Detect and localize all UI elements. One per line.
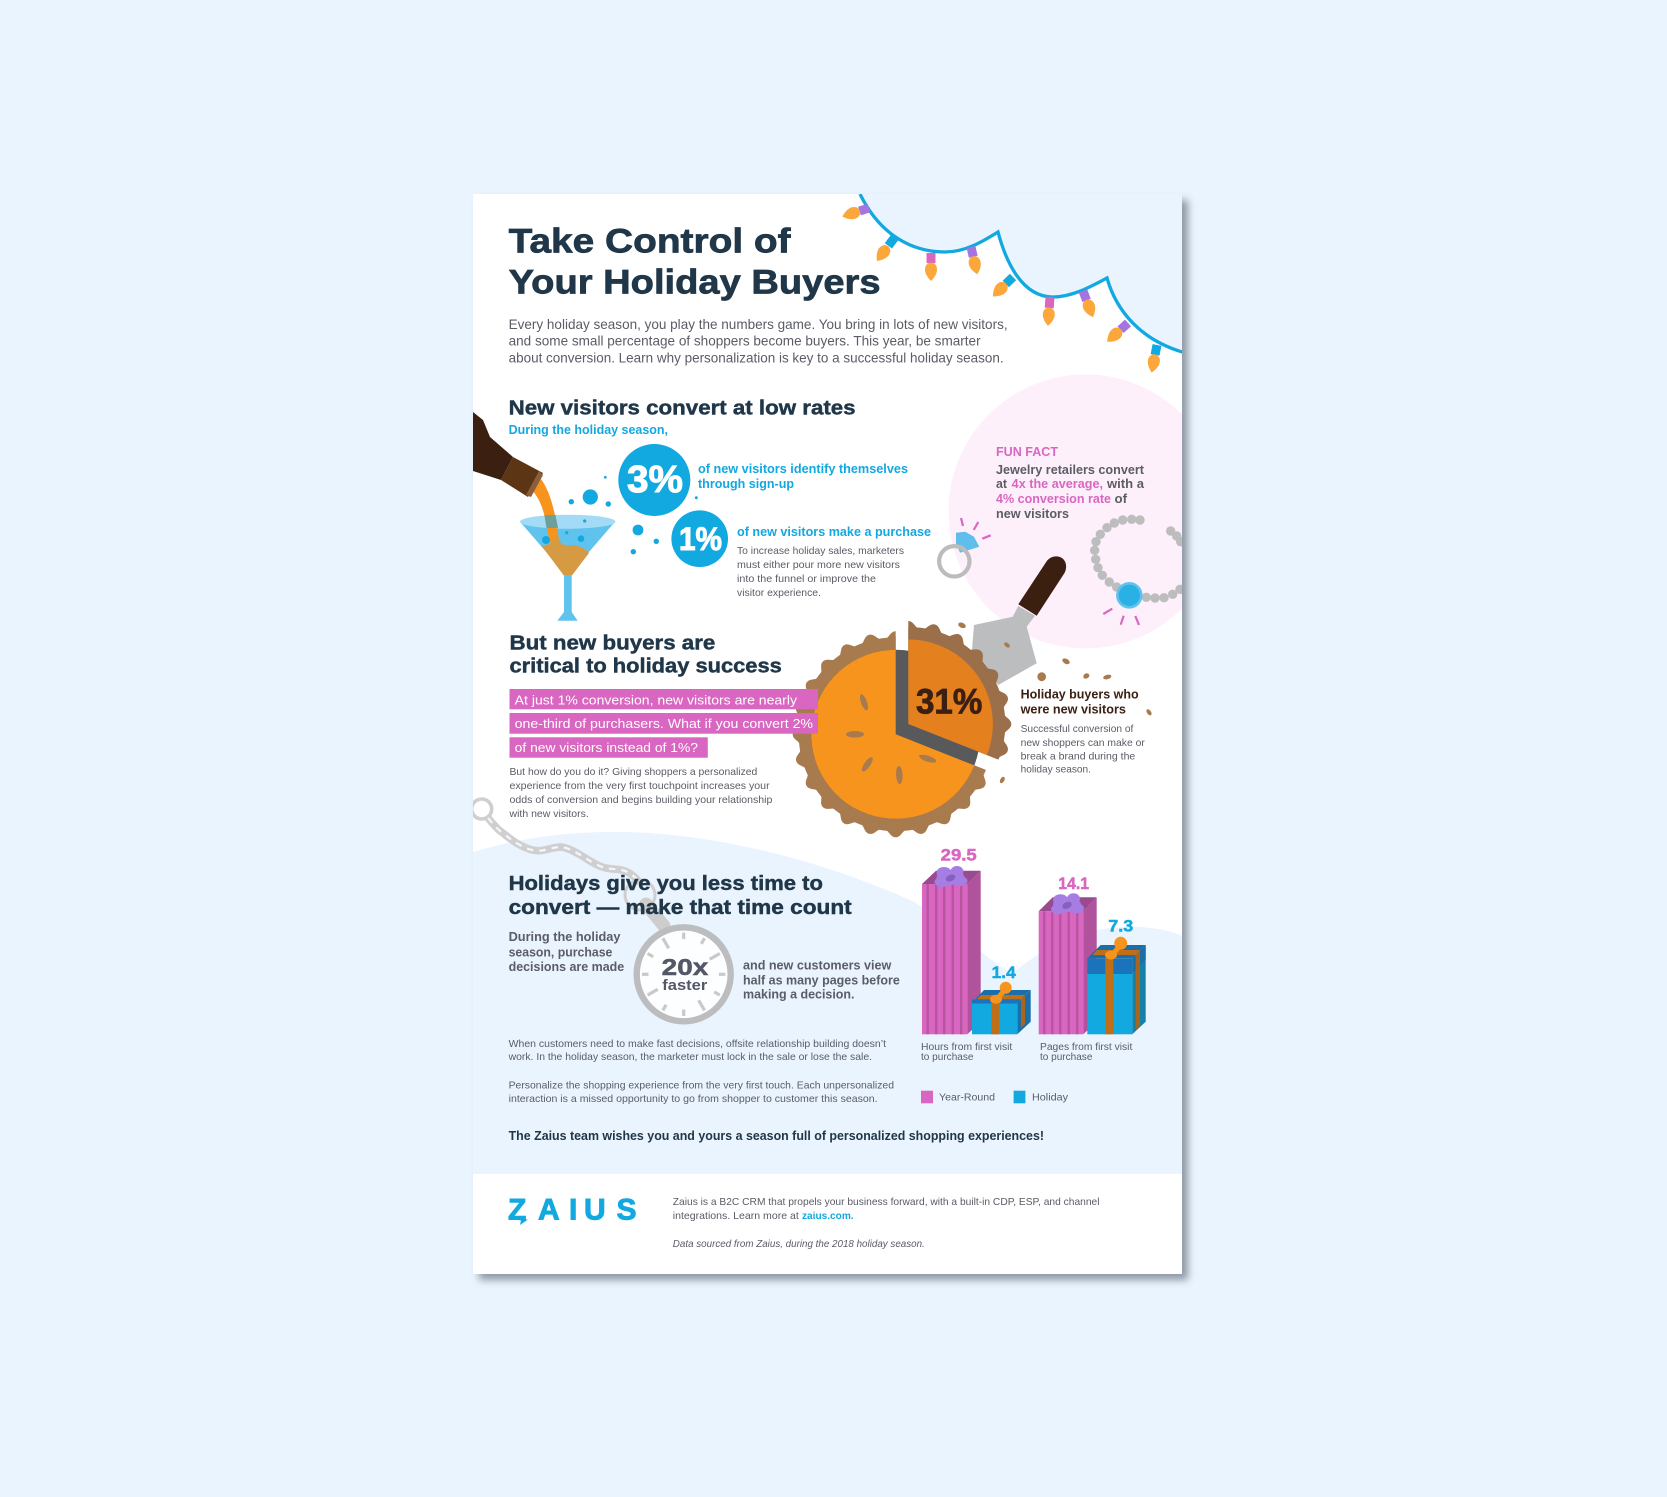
- stat: 3%: [618, 444, 690, 516]
- text: new customers view: [743, 958, 900, 1001]
- text: holiday buyers heading: were new visitors: [1020, 702, 1126, 716]
- callout: pink highlighted text: [510, 689, 818, 758]
- icon: stopwatch 20x faster: [637, 927, 731, 1021]
- stat: 1% description: of new visitors make a purchase: [737, 525, 931, 539]
- page shadow: [479, 200, 1188, 1280]
- chart: pie showing 31 percent: [793, 621, 1011, 837]
- text block: successful conversion: holiday season.: [1021, 764, 1091, 776]
- text: purchase decisions: season, purchase: [509, 945, 612, 959]
- stat: 3% description: of new visitors identify themselves: [698, 462, 908, 476]
- legend: Year-Round: [939, 1092, 995, 1103]
- intro paragraph: and some small percentage of shoppers become buyers. This year, be smarter: [509, 333, 981, 349]
- light bulb 6: [1042, 296, 1055, 326]
- heading: new buyers: But new buyers are: [510, 631, 715, 654]
- light bulb 9: [1148, 344, 1162, 372]
- stat: 1%: 1%: [679, 521, 722, 557]
- caption: pages: Pages from first visit: [1040, 1042, 1133, 1053]
- text: new customers view: and new customers view: [743, 958, 892, 972]
- panel: lower light blue background: [473, 832, 1182, 1174]
- footer description: Zaius is a B2C CRM that propels your business forward, with a built-in CDP, ESP, and channel: [673, 1196, 1100, 1208]
- light bulb 8: [1107, 320, 1131, 342]
- caption: hours: Hours from first visit: [921, 1042, 1013, 1053]
- stopwatch label: 20x: [662, 954, 708, 980]
- glass stem: [564, 576, 572, 614]
- bar: holiday pages: [1087, 937, 1146, 1034]
- text block: personalized experience: But how do you do it? Giving shoppers a personalized: [510, 766, 757, 778]
- heading: holidays less time: Holidays give you less time to: [509, 872, 823, 895]
- text block: personalize experience: [509, 1079, 894, 1105]
- pie vents: [846, 693, 937, 784]
- icon: pearl necklace: [1090, 515, 1185, 625]
- text block: fast decisions: work. In the holiday season, the marketer must lock in the sale or lose the sale.: [508, 1051, 872, 1063]
- glass rim: [520, 515, 615, 529]
- sky behind garland: [860, 194, 1182, 352]
- bar chart: gifts hours from first visit: [921, 846, 1031, 1063]
- fun fact text: at: [996, 477, 1008, 491]
- bottle body: [473, 412, 513, 480]
- garland string: [860, 194, 1184, 352]
- pie value: 31%: [916, 682, 982, 721]
- text block: fast decisions: When customers need to make fast decisions, offsite relationship building doesn’t: [509, 1038, 886, 1050]
- text block: increase holiday sales: To increase holiday sales, marketers: [737, 545, 904, 557]
- stat: 3%: 3%: [627, 459, 683, 501]
- subheading: during the holiday season: During the holiday season,: [509, 423, 668, 437]
- glass base: [557, 612, 578, 621]
- pie crust: [793, 631, 999, 837]
- light bulb 2: [876, 236, 898, 261]
- crumbs: [957, 621, 1153, 784]
- closing message: The Zaius team wishes you and yours a season full of personalized shopping experiences!: [509, 1129, 1044, 1143]
- text block: increase holiday sales: must either pour more new visitors: [737, 559, 900, 571]
- stream over rim: [544, 515, 558, 528]
- value: 29.5: 29.5: [941, 846, 977, 865]
- text: holiday buyers heading: [1020, 687, 1139, 716]
- fun fact text: [996, 445, 1145, 521]
- infographic sheet: [473, 194, 1182, 1274]
- light bulb 5: [992, 274, 1016, 296]
- heading: holidays less time: convert — make that time count: [509, 896, 852, 919]
- text block: successful conversion: [1021, 723, 1145, 776]
- heading: holidays less time: [509, 872, 852, 919]
- heading: new buyers: [510, 631, 782, 678]
- caption: hours: to purchase: [921, 1052, 974, 1063]
- text: holiday buyers heading: Holiday buyers who: [1021, 687, 1139, 701]
- panel: fun fact pink circle: [948, 374, 1182, 648]
- caption: pages: to purchase: [1040, 1052, 1093, 1063]
- bar: year-round pages: [1039, 893, 1097, 1034]
- bottle lip: [526, 471, 543, 497]
- intro paragraph: Every holiday season, you play the numbers game. You bring in lots of new visitors,: [509, 316, 1008, 332]
- icon: stopwatch chain: [472, 799, 664, 926]
- fun fact text: 4% conversion rate: [996, 492, 1111, 506]
- stat: 3% description: [698, 462, 908, 491]
- legend: [921, 1091, 1068, 1103]
- intro paragraph: about conversion. Learn why personalization is key to a successful holiday season.: [509, 350, 1004, 366]
- heading: new buyers: critical to holiday success: [510, 655, 782, 678]
- stat: 1%: [671, 510, 728, 567]
- light bulb 3: [925, 253, 937, 281]
- fun fact text: 4x the average,: [1012, 477, 1103, 491]
- footer description: integrations. Learn more at: [673, 1210, 799, 1222]
- legend: Holiday: [1032, 1092, 1068, 1103]
- title: Your Holiday Buyers: [509, 263, 881, 301]
- fun fact text: Jewelry retailers convert: [996, 463, 1145, 477]
- text: new customers view: making a decision.: [743, 987, 854, 1001]
- logo: Zaius: ZAIUS: [508, 1194, 637, 1227]
- light bulb 7: [1078, 289, 1096, 318]
- text block: increase holiday sales: [737, 545, 904, 599]
- icon: diamond ring: [939, 518, 991, 576]
- text block: personalize experience: interaction is a missed opportunity to go from shopper to customer this season.: [509, 1093, 878, 1105]
- value: 1.4: 1.4: [992, 963, 1016, 982]
- glass cone: [520, 522, 615, 577]
- text block: personalized experience: odds of conversion and begins building your relationship: [510, 794, 773, 806]
- title: Take Control of: [509, 223, 791, 261]
- caption: pages: [1040, 1042, 1133, 1063]
- text block: successful conversion: Successful conversion of: [1021, 723, 1133, 735]
- text block: successful conversion: break a brand during the: [1021, 750, 1135, 762]
- fun fact text: new visitors: [996, 507, 1069, 521]
- callout: pink highlighted text: one-third of purchasers. What if you convert 2%: [515, 716, 813, 731]
- text block: personalized experience: with new visitors.: [509, 808, 589, 820]
- text block: personalize experience: Personalize the shopping experience from the very first touch. Each unpersonalized: [509, 1079, 894, 1091]
- panel: footer: [473, 1174, 1182, 1274]
- text block: successful conversion: new shoppers can make or: [1021, 737, 1145, 749]
- pie filling: [811, 650, 974, 819]
- text: purchase decisions: During the holiday: [509, 930, 621, 944]
- text block: personalized experience: experience from the very first touchpoint increases your: [510, 780, 770, 792]
- text block: personalized experience: [509, 766, 773, 820]
- light bulb 4: [966, 246, 981, 274]
- caption: hours: [921, 1042, 1013, 1063]
- bottle neck: [501, 457, 543, 497]
- fun fact text: of: [1114, 492, 1128, 506]
- icon: stopwatch 20x faster: faster: [662, 977, 707, 994]
- value: 14.1: 14.1: [1058, 874, 1089, 893]
- stopwatch ticks: [642, 933, 725, 1016]
- footer description: [673, 1196, 1100, 1222]
- pie slice: [908, 621, 1012, 760]
- text: purchase decisions: [509, 930, 624, 974]
- bar chart: gifts pages from first visit: [1039, 874, 1146, 1063]
- footer description: zaius.com.: [802, 1210, 854, 1222]
- fun fact text: with a: [1106, 477, 1145, 491]
- title: [509, 223, 881, 301]
- icon: cocktail glass and bottle: [473, 412, 615, 621]
- garland of holiday lights: [841, 194, 1184, 374]
- icon: pie spatula: [972, 556, 1066, 685]
- intro paragraph: [509, 316, 1008, 366]
- fun fact text: FUN FACT: [996, 445, 1058, 459]
- bar: year-round hours: [922, 866, 981, 1034]
- callout: pink highlighted text: At just 1% conversion, new visitors are nearly: [515, 692, 798, 707]
- bar: holiday hours: [972, 982, 1031, 1034]
- light bulb 1: [842, 204, 870, 220]
- pie hole: [811, 650, 980, 819]
- text: new customers view: half as many pages before: [743, 973, 900, 987]
- text block: increase holiday sales: visitor experience.: [737, 587, 821, 599]
- liquid in glass: [542, 530, 589, 576]
- bubbles: [542, 476, 698, 554]
- data source note: Data sourced from Zaius, during the 2018 holiday season.: [673, 1238, 925, 1250]
- text: purchase decisions: decisions are made: [509, 960, 624, 974]
- text block: increase holiday sales: into the funnel or improve the: [737, 573, 876, 585]
- value: 7.3: 7.3: [1108, 917, 1133, 936]
- callout: pink highlighted text: of new visitors instead of 1%?: [515, 740, 698, 755]
- text block: fast decisions: [508, 1038, 886, 1063]
- stat: 3% description: through sign-up: [698, 477, 794, 491]
- poured stream: [532, 479, 558, 544]
- heading: new visitors: New visitors convert at low rates: [509, 396, 856, 419]
